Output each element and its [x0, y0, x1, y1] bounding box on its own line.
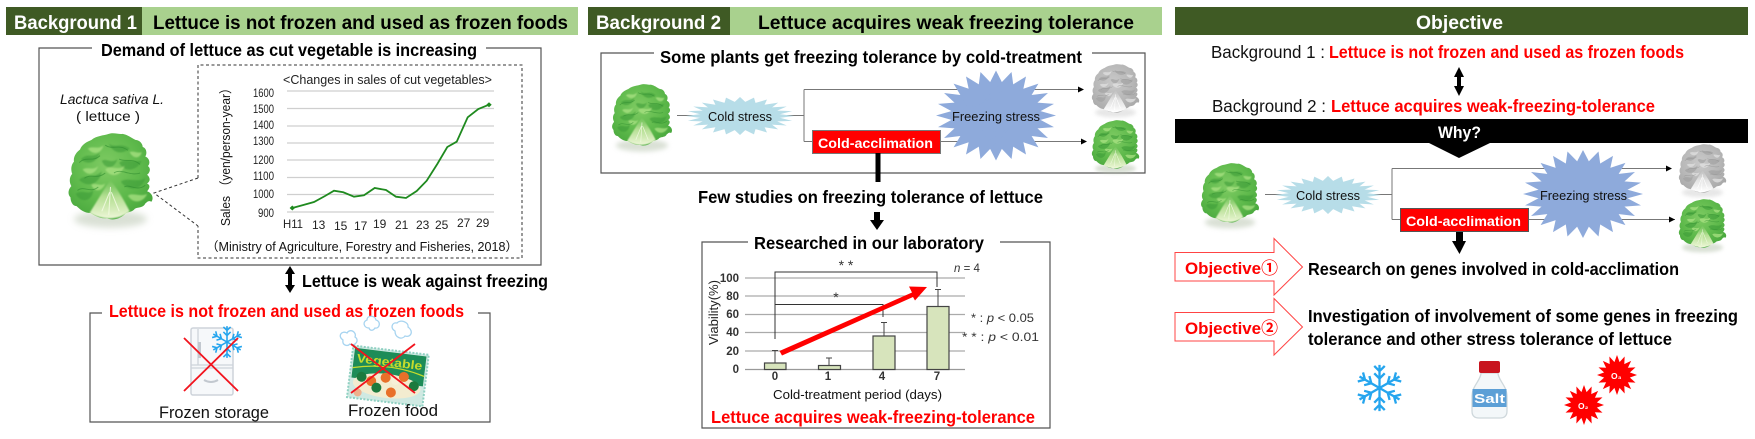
icon: ozone burst 1: O₃: [1611, 371, 1622, 381]
arrow label: objective 2: [1175, 298, 1302, 355]
text: few studies: Few studies on freezing tolerance of lettuce: [698, 187, 1043, 207]
header: Background 2: [588, 7, 1162, 35]
bar chart: viability: 7: [934, 371, 940, 383]
icon: freezer: [184, 326, 243, 395]
line chart: sales of cut vegetables: 27: [457, 216, 471, 230]
double arrow: weak against freezing: [285, 266, 295, 293]
box: cold-acclimation: [1400, 208, 1528, 232]
icon: healthy lettuce: [1092, 120, 1139, 173]
burst: cold stress: [1272, 175, 1384, 215]
bar chart: viability: * : p < 0.05: [971, 311, 1034, 325]
bar chart: viability: Cold-treatment period (days): [773, 387, 942, 402]
icon: lettuce: [69, 133, 153, 228]
icon: healthy lettuce: [1679, 199, 1726, 252]
icon: damaged lettuce: [1092, 64, 1139, 117]
chart callout box: [154, 65, 522, 258]
icon: salt bottle: Salt: [1474, 391, 1506, 406]
double arrow: backgrounds: [1454, 67, 1464, 96]
bar chart: viability: * * : p < 0.01: [962, 330, 1039, 344]
panel heading: not frozen: Lettuce is not frozen and used as frozen foods: [109, 301, 464, 321]
line chart: sales of cut vegetables: Sales （yen/person-year）: [218, 82, 233, 226]
box: cold-acclimation: Cold-acclimation: [818, 135, 933, 151]
header: Background 1: Lettuce is not frozen and used as frozen foods: [153, 12, 568, 34]
arrow label: objective 1: Objective①: [1185, 259, 1278, 278]
bar chart: viability: [707, 257, 1039, 402]
panel heading: cold treatment: Some plants get freezing tolerance by cold-treatment: [660, 47, 1082, 67]
label: frozen storage: Frozen storage: [159, 403, 269, 422]
text: lettuce is weak against freezing: Lettuce is weak against freezing: [302, 271, 548, 291]
banner: why: [1175, 119, 1748, 158]
line chart: sales of cut vegetables: 1000: [253, 189, 274, 201]
line chart: sales of cut vegetables: 17: [354, 219, 368, 233]
burst: cold stress: Cold stress: [708, 110, 772, 124]
panel: cold treatment diagram: [601, 47, 1145, 173]
bar chart: viability: 20: [726, 346, 739, 358]
text: background 1 summary: Lettuce is not frozen and used as frozen foods: [1329, 42, 1684, 62]
bar chart: viability: 100: [720, 273, 739, 285]
line chart: sales of cut vegetables: 1600: [253, 88, 274, 100]
line chart: sales of cut vegetables: 1500: [253, 104, 274, 116]
arrow label: objective 2: Objective②: [1185, 319, 1278, 338]
line chart: sales of cut vegetables: H11: [283, 217, 303, 231]
box: cold-acclimation: [812, 130, 940, 154]
line chart: sales of cut vegetables: <Changes in sales of cut vegetables>: [283, 73, 492, 87]
conclusion text: Lettuce acquires weak-freezing-tolerance: [711, 407, 1035, 427]
burst: freezing stress: Freezing stress: [952, 110, 1040, 124]
text: background 1 summary: Background 1 :: [1211, 42, 1325, 62]
line chart: sales of cut vegetables: 19: [373, 217, 387, 231]
bar chart: viability: 0: [733, 364, 739, 376]
flow lines: [677, 86, 1087, 144]
line chart: sales of cut vegetables: 1400: [253, 120, 274, 132]
connector bar: [876, 153, 880, 182]
burst: freezing stress: [932, 68, 1060, 163]
icon: damaged lettuce: [1679, 144, 1726, 197]
panel: laboratory results: [702, 233, 1050, 428]
bar chart: viability: 0: [772, 371, 778, 383]
icon: lettuce: [612, 84, 672, 152]
header: Background 2: Background 2: [596, 12, 721, 34]
line chart: sales of cut vegetables: [206, 73, 518, 254]
text: background 2 summary: Lettuce acquires weak-freezing-tolerance: [1331, 96, 1655, 116]
species label: [60, 92, 164, 124]
icon: lettuce: [1201, 163, 1259, 228]
icon: ozone burst 2: O₂: [1578, 401, 1589, 411]
text: objective 1: Research on genes involved in cold-acclimation: [1308, 259, 1679, 279]
species label: Lactuca sativa L.: [60, 92, 164, 107]
text: objective 2: [1308, 306, 1738, 349]
panel heading: demand: Demand of lettuce as cut vegetable is increasing: [101, 40, 477, 60]
bar chart: viability: Viability(%): [707, 280, 721, 345]
bar chart: viability: 40: [726, 327, 739, 339]
burst: cold stress: [683, 96, 797, 136]
line chart: sales of cut vegetables: 29: [476, 216, 490, 230]
icon: ozone burst 1: [1596, 354, 1638, 396]
header: Background 1: Background 1: [14, 12, 137, 34]
banner: why: Why?: [1438, 123, 1481, 142]
panel heading: laboratory: Researched in our laboratory: [754, 233, 984, 253]
burst: cold stress: Cold stress: [1296, 189, 1360, 203]
arrow: down to objective: [1452, 232, 1466, 254]
arrow label: objective 1: [1175, 238, 1302, 295]
arrow: to laboratory panel: [870, 212, 884, 230]
line chart: sales of cut vegetables: 1100: [253, 171, 274, 183]
box: cold-acclimation: Cold-acclimation: [1406, 213, 1521, 229]
species label: ( lettuce ): [76, 109, 140, 124]
line chart: sales of cut vegetables: 1300: [253, 136, 274, 148]
icon: ozone burst 2: [1563, 384, 1605, 426]
bar chart: viability: 1: [825, 371, 832, 383]
bar chart: viability: * *: [839, 257, 854, 273]
flow lines: [1265, 166, 1675, 222]
bar chart: viability: *: [833, 289, 839, 305]
panel: not frozen: [90, 301, 490, 422]
burst: freezing stress: [1519, 147, 1647, 241]
header: Objective: [1175, 7, 1748, 35]
burst: freezing stress: Freezing stress: [1540, 189, 1627, 203]
header: Background 2: Lettuce acquires weak freezing tolerance: [758, 12, 1134, 34]
bar chart: viability: 4: [879, 371, 886, 383]
bar chart: viability: n = 4: [954, 263, 981, 275]
icon: snowflake: [1357, 365, 1402, 411]
line chart: sales of cut vegetables: （Ministry of Agriculture, Forestry and Fisheries, 2018）: [206, 240, 518, 254]
line chart: sales of cut vegetables: 21: [395, 218, 409, 232]
arrow: rising viability: [780, 286, 927, 356]
bar chart: viability: 80: [726, 291, 739, 303]
bar chart: viability: 60: [726, 309, 739, 321]
text: objective 2: Investigation of involvement of some genes in freezing: [1308, 306, 1738, 326]
line chart: sales of cut vegetables: 13: [312, 218, 326, 232]
icon: frozen food: Vegetable: [356, 351, 424, 373]
header: Background 1: [6, 7, 578, 35]
panel: demand of lettuce: [39, 40, 541, 265]
line chart: sales of cut vegetables: 1200: [253, 155, 274, 167]
label: frozen food: Frozen food: [348, 401, 438, 420]
diagram: cold-acclimation flow: [1201, 144, 1726, 254]
text: objective 2: tolerance and other stress tolerance of lettuce: [1308, 329, 1672, 349]
line chart: sales of cut vegetables: 25: [435, 218, 449, 232]
line chart: sales of cut vegetables: 23: [416, 218, 430, 232]
icon: frozen food: [340, 316, 429, 406]
line chart: sales of cut vegetables: 900: [258, 208, 274, 220]
text: background 2 summary: Background 2 :: [1212, 96, 1326, 116]
line chart: sales of cut vegetables: 15: [334, 219, 348, 233]
header: Objective: Objective: [1416, 12, 1503, 34]
icon: salt bottle: [1472, 361, 1507, 418]
